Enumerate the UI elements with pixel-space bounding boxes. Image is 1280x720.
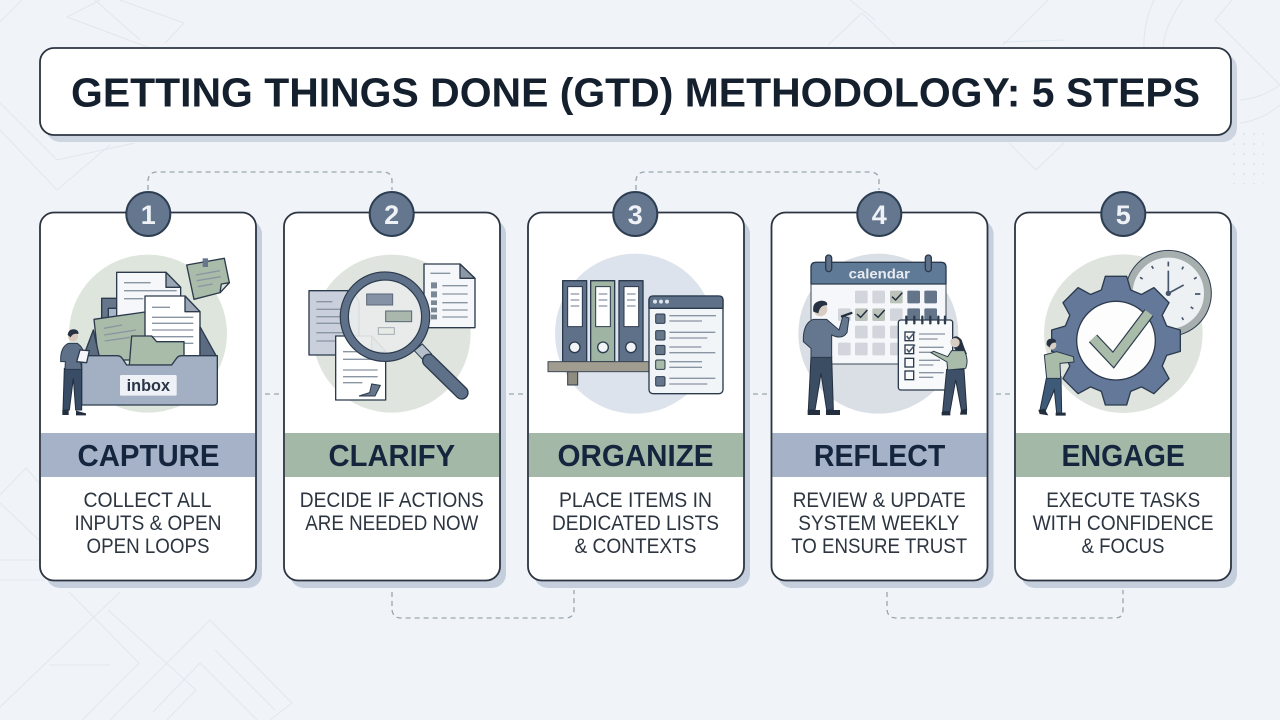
text: reflect description: REVIEW & UPDATE (793, 489, 966, 512)
icon: inbox tray with documents (61, 255, 229, 415)
text: capture description (74, 489, 222, 558)
icon: calendar with people and checklist (798, 254, 967, 415)
text: engage description: EXECUTE TASKS (1046, 489, 1200, 512)
heading: engage (1016, 433, 1230, 477)
title (40, 48, 1237, 142)
heading: capture: CAPTURE (78, 438, 220, 473)
text: organize description (552, 489, 719, 558)
panel: step 2 clarify (284, 192, 506, 588)
badge: 3: 3 (628, 200, 643, 230)
badge: 1 (126, 192, 170, 236)
text: organize description: PLACE ITEMS IN (559, 489, 712, 512)
panel: step 5 engage (1015, 192, 1237, 588)
heading: capture (41, 433, 255, 477)
text: clarify description (300, 489, 484, 535)
heading: organize: ORGANIZE (558, 438, 714, 473)
badge: 2: 2 (384, 200, 399, 230)
heading: reflect: REFLECT (814, 438, 945, 473)
text: clarify description: DECIDE IF ACTIONS (300, 489, 484, 512)
icon: binders on shelf and list window (548, 254, 723, 414)
heading: engage: ENGAGE (1062, 438, 1185, 473)
badge: 4 (857, 192, 901, 236)
text: organize description: & CONTEXTS (574, 535, 696, 558)
dashed connectors (148, 172, 1123, 618)
text: capture description: OPEN LOOPS (86, 535, 210, 558)
text: engage description: WITH CONFIDENCE (1033, 512, 1214, 535)
text: capture description: INPUTS & OPEN (74, 512, 222, 535)
label: calendar: calendar (849, 267, 911, 282)
title: GETTING THINGS DONE (GTD) METHODOLOGY: 5 STEPS (71, 70, 1200, 116)
badge: 4: 4 (872, 200, 887, 230)
text: engage description: & FOCUS (1082, 535, 1164, 558)
heading: clarify (285, 433, 499, 477)
panel: step 4 reflect (772, 192, 994, 588)
badge: 1: 1 (141, 200, 156, 230)
text: organize description: DEDICATED LISTS (552, 512, 719, 535)
label: inbox: inbox (127, 376, 171, 395)
heading: clarify: CLARIFY (329, 438, 455, 473)
text: reflect description: SYSTEM WEEKLY (798, 512, 959, 535)
panel: step 1 capture (40, 192, 262, 588)
text: engage description (1033, 489, 1214, 558)
badge: 3 (613, 192, 657, 236)
badge: 5: 5 (1116, 200, 1131, 230)
text: reflect description (791, 489, 967, 558)
text: clarify description: ARE NEEDED NOW (305, 512, 478, 535)
heading: reflect (772, 433, 986, 477)
icon: magnifying glass over documents (309, 255, 475, 413)
heading: organize (529, 433, 743, 477)
badge: 2 (370, 192, 414, 236)
text: capture description: COLLECT ALL (84, 489, 212, 512)
panel: step 3 organize (528, 192, 750, 588)
badge: 5 (1101, 192, 1145, 236)
icon: gear with checkmark, clock and person (1038, 250, 1211, 416)
text: reflect description: TO ENSURE TRUST (791, 535, 967, 558)
